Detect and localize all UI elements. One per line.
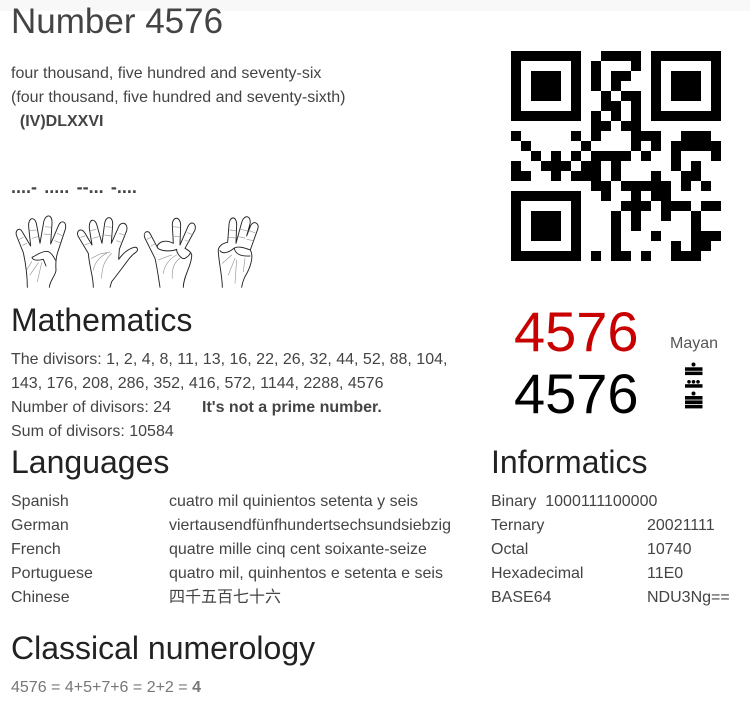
icon: Mayan numeral [685, 362, 702, 408]
morse code: ....- ..... --... -.... [11, 177, 137, 197]
icon: sign language hands [16, 216, 259, 288]
divisors text block: It's not a prime number. [202, 399, 382, 416]
informatics table: BASE64 [491, 589, 551, 606]
heading: Languages: Languages [11, 444, 169, 480]
divisors text block: Number of divisors: 24 [11, 399, 171, 416]
hand one [16, 216, 66, 287]
languages table: quatro mil, quinhentos e setenta e seis [169, 565, 443, 582]
languages table: Spanish [11, 493, 69, 510]
informatics table: 20021111 [647, 517, 715, 534]
heading: Mathematics: Mathematics [11, 302, 192, 338]
big red number: 4576 [514, 300, 639, 363]
informatics table: Octal [491, 541, 528, 558]
languages table: Portuguese [11, 565, 93, 582]
numerology text: 4576 = 4+5+7+6 = 2+2 = 4 [11, 679, 201, 696]
languages table: German [11, 517, 69, 534]
hand three [144, 218, 195, 287]
hand four [218, 217, 258, 287]
heading: Informatics: Informatics [491, 444, 647, 480]
divisors text block: 143, 176, 208, 286, 352, 416, 572, 1144, 2288, 4576 [11, 375, 383, 392]
languages table: French [11, 541, 61, 558]
informatics table: NDU3Ng== [647, 589, 730, 606]
heading: Classical numerology: Classical numerology [11, 630, 315, 666]
roman numeral: (IV)DLXXVI [20, 113, 103, 130]
big black number: 4576 [514, 362, 639, 425]
divisors text block: The divisors: 1, 2, 4, 8, 11, 13, 16, 22, 26, 32, 44, 52, 88, 104, [11, 351, 447, 368]
languages table: viertausendfünfhundertsechsundsiebzig [169, 517, 451, 534]
title: Number 4576 [11, 2, 223, 41]
top bar [0, 0, 750, 11]
languages table: Chinese [11, 589, 70, 606]
languages table: 四千五百七十六 [169, 589, 281, 606]
number name in words: four thousand, five hundred and seventy-six (four thousand, five hundred and seventy-sixth) [11, 65, 345, 106]
informatics table [491, 493, 730, 606]
informatics table: 11E0 [647, 565, 683, 582]
languages table [11, 493, 451, 606]
informatics table: Binary 1000111100000 [491, 493, 657, 510]
languages table: quatre mille cinq cent soixante-seize [169, 541, 427, 558]
informatics table: 10740 [647, 541, 692, 558]
informatics table: Hexadecimal [491, 565, 583, 582]
languages table: cuatro mil quinientos setenta y seis [169, 493, 418, 510]
informatics table: Ternary [491, 517, 544, 534]
QR code [511, 51, 721, 261]
divisors text block: Sum of divisors: 10584 [11, 423, 174, 440]
hand two [78, 218, 137, 287]
divisors text block [11, 351, 447, 440]
Mayan label: Mayan [670, 335, 718, 352]
